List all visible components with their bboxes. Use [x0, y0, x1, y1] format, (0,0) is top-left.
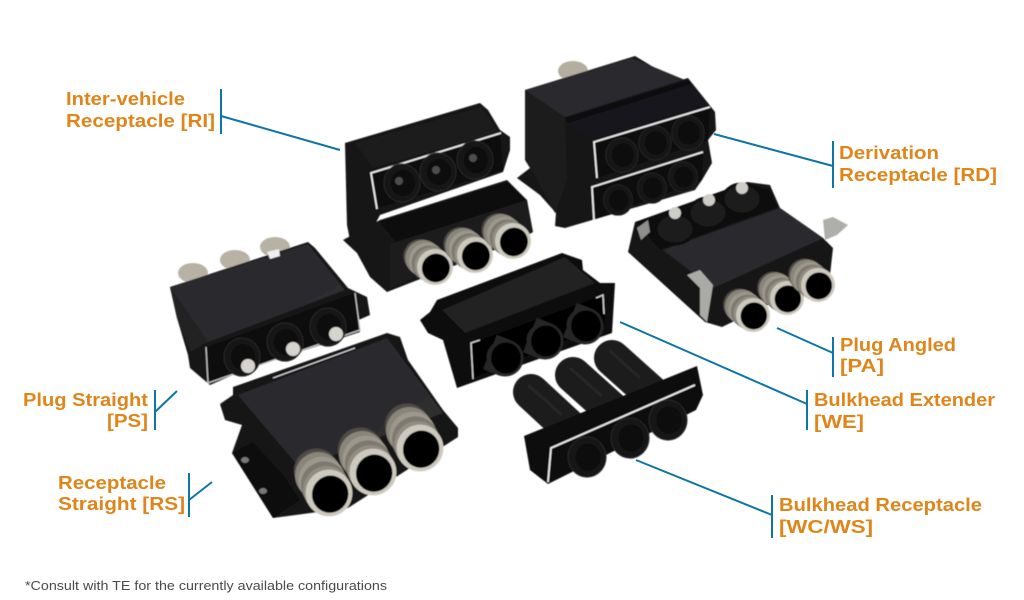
product: Plug Straight PS — [170, 237, 370, 385]
callout: Bulkhead Extender — [620, 322, 995, 432]
callout: Plug Angled: [PA] — [840, 356, 884, 376]
callout: Plug Angled: Plug Angled — [840, 335, 956, 355]
callout: Receptacle Straight: Receptacle — [58, 473, 166, 493]
product: Receptacle Straight RS — [220, 333, 458, 519]
callout: Derivation Receptacle — [714, 134, 997, 188]
callout: Bulkhead Receptacle — [636, 460, 982, 538]
callout: Derivation Receptacle: Receptacle [RD] — [839, 165, 997, 185]
callout: Receptacle Straight: Straight [RS] — [58, 494, 185, 514]
callout: Receptacle Straight — [58, 473, 212, 517]
callout: Inter-vehicle Receptacle — [66, 89, 340, 150]
callout: Plug Straight: Plug Straight — [23, 390, 148, 410]
product: Bulkhead Extender WE — [420, 253, 615, 388]
product: Inter-vehicle Receptacle RI — [343, 103, 533, 292]
callout: Inter-vehicle Receptacle: Inter-vehicle — [66, 89, 185, 109]
callout: Bulkhead Extender: [WE] — [814, 412, 864, 432]
callout: Bulkhead Receptacle: Bulkhead Receptacle — [779, 495, 982, 515]
product: Bulkhead Receptacle WC/WS — [524, 351, 703, 484]
product: Plug Angled PA — [628, 182, 848, 334]
callout: Bulkhead Extender: Bulkhead Extender — [814, 390, 995, 410]
callout: Plug Angled — [777, 328, 956, 377]
callout: Inter-vehicle Receptacle: Receptacle [RI] — [66, 111, 215, 131]
callout: Derivation Receptacle: Derivation — [839, 143, 939, 163]
footnote: *Consult with TE for the currently available configurations — [25, 579, 387, 593]
product: Derivation Receptacle RD — [517, 56, 716, 228]
callout: Plug Straight — [23, 390, 177, 431]
callout: Bulkhead Receptacle: [WC/WS] — [779, 517, 873, 537]
callout: Plug Straight: [PS] — [107, 411, 148, 431]
